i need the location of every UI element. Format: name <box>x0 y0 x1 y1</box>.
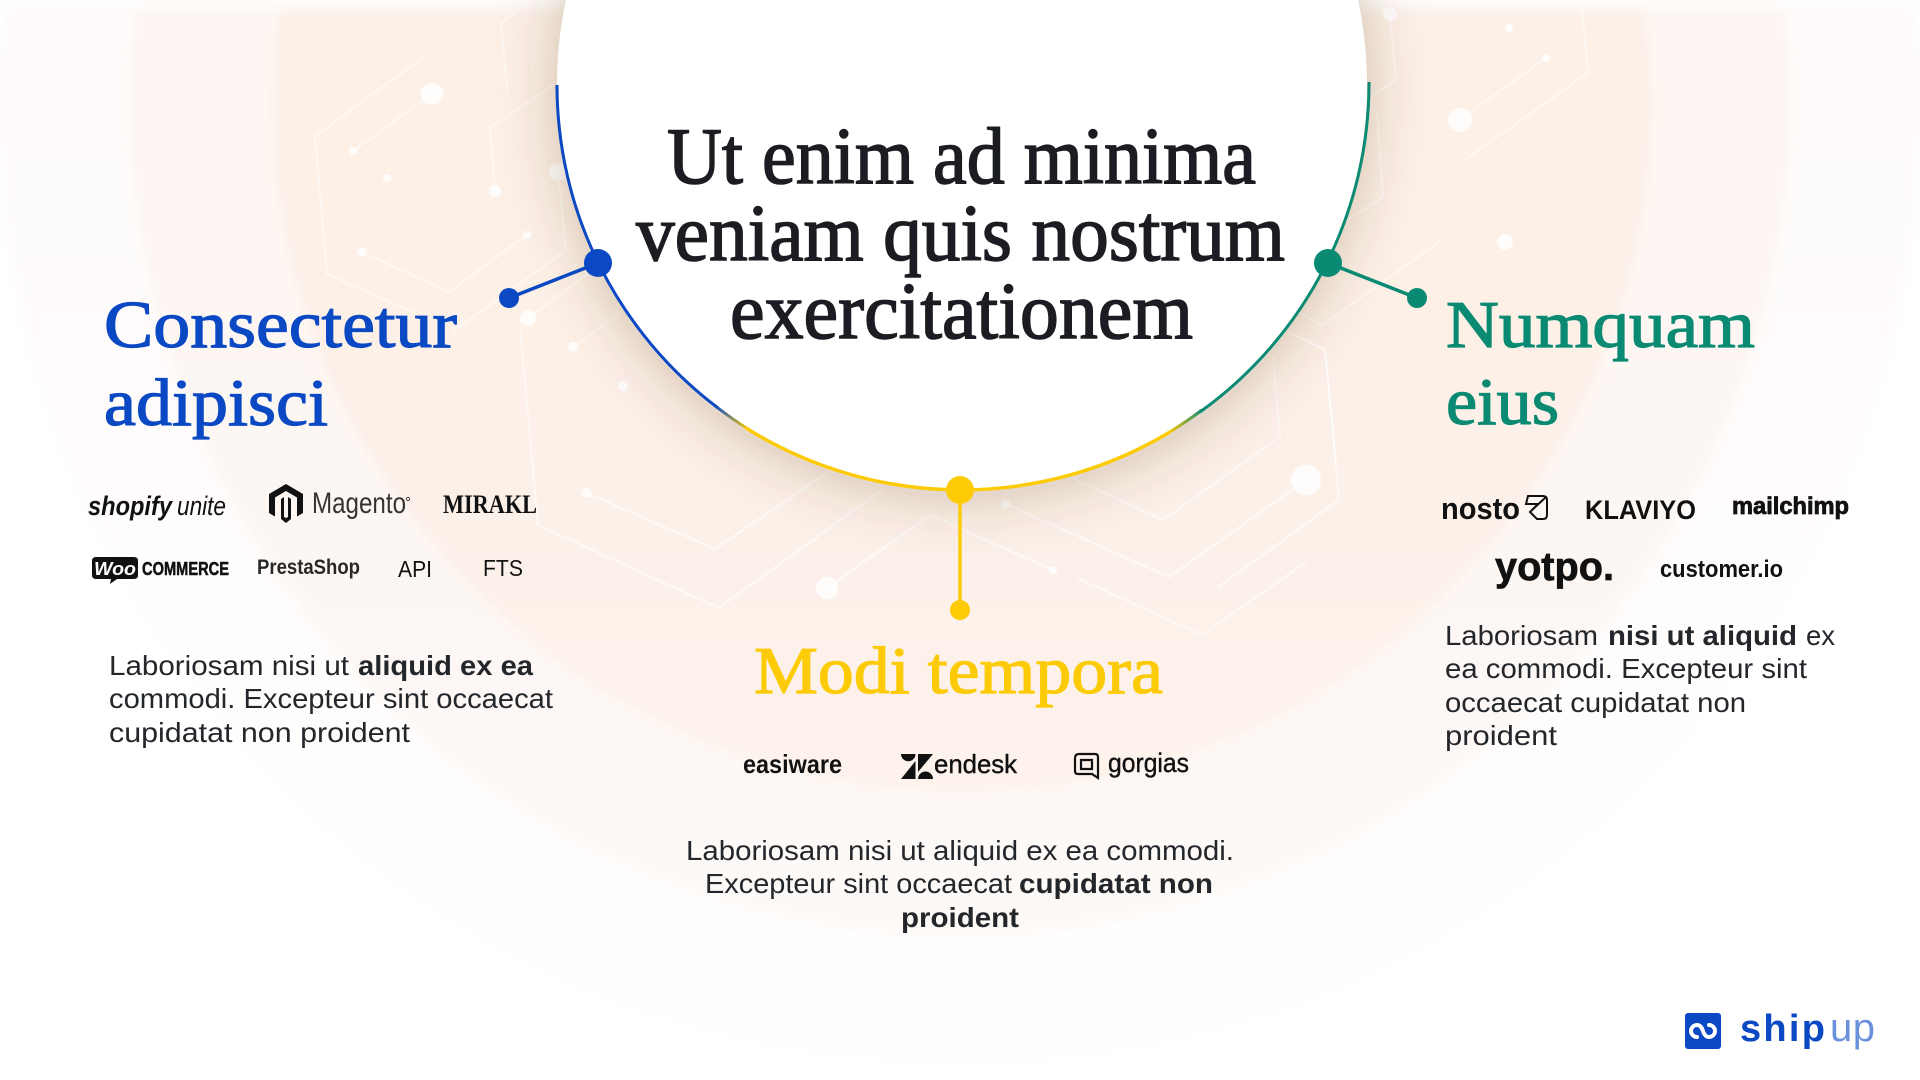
text block: centre description <box>686 835 1234 933</box>
logo: shopify unite <box>88 491 226 521</box>
title <box>636 111 1285 356</box>
heading: Consectetur adipisci <box>104 288 457 440</box>
logo: PrestaShop: PrestaShop <box>257 556 360 579</box>
text block: right description: proident <box>1445 720 1557 751</box>
logo: Magento <box>269 484 410 523</box>
text block: left description: Laboriosam nisi ut <box>109 650 349 681</box>
panel: left column <box>88 288 553 748</box>
heading: Consectetur adipisci: Consectetur <box>104 288 457 362</box>
heading: Numquam eius: Numquam <box>1446 288 1755 362</box>
text block: left description: cupidatat non proident <box>109 717 410 748</box>
title: exercitationem <box>730 266 1193 356</box>
heading: Numquam eius <box>1446 288 1755 439</box>
text block: centre description: Laboriosam nisi ut aliquid ex ea commodi. <box>686 835 1234 866</box>
logo: Zendesk: endesk <box>934 749 1018 779</box>
logo: gorgias <box>1075 748 1189 778</box>
logo: shipup brand: ship <box>1740 1008 1825 1050</box>
background circuit pattern <box>315 0 1588 635</box>
text block: right description <box>1445 620 1835 751</box>
logo: gorgias: gorgias <box>1108 748 1189 778</box>
text block: right description: occaecat cupidatat non <box>1445 687 1746 718</box>
title: veniam quis nostrum <box>636 188 1285 278</box>
logo: FTS: FTS <box>483 555 523 581</box>
heading: Consectetur adipisci: adipisci <box>104 366 328 440</box>
text block: centre description: proident <box>901 902 1019 933</box>
logo: Klaviyo: KLAVIYO <box>1585 495 1696 525</box>
title: Ut enim ad minima <box>667 111 1256 201</box>
logo: shipup brand <box>1685 1006 1875 1050</box>
text block: right description: nisi ut aliquid <box>1608 620 1797 651</box>
central white circle <box>557 0 1367 490</box>
logo: customer.io: customer.io <box>1660 556 1783 583</box>
logo: Mirakl: MIRAKL <box>443 490 537 519</box>
heading: Numquam eius: eius <box>1446 365 1559 439</box>
panel: centre column <box>686 634 1234 933</box>
panel: right column <box>1441 288 1849 751</box>
logo: WooCommerce: Woo <box>94 559 136 579</box>
heading: Modi tempora: Modi tempora <box>754 634 1163 708</box>
logo: WooCommerce <box>92 557 229 584</box>
text block: left description: aliquid ex ea <box>358 650 533 681</box>
logo: nosto: nosto <box>1441 491 1520 526</box>
logo: shopify unite: unite <box>177 491 226 521</box>
text block: centre description: Excepteur sint occaecat <box>705 868 1012 899</box>
connector: yellow <box>946 476 974 620</box>
logo: API: API <box>398 556 432 582</box>
connector: blue <box>499 249 612 308</box>
top edge fade <box>0 0 1920 16</box>
logo: Magento: Magento <box>312 487 406 520</box>
text block: left description: commodi. Excepteur sint occaecat <box>109 683 553 714</box>
logo: shopify unite: shopify <box>88 491 174 521</box>
text block: right description: ea commodi. Excepteur sint <box>1445 653 1807 684</box>
coloured arc around circle <box>557 82 1369 490</box>
logo: easiware: easiware <box>743 749 842 779</box>
text block: right description: Laboriosam <box>1445 620 1598 651</box>
logo: yotpo: yotpo. <box>1495 545 1614 589</box>
logo: WooCommerce: COMMERCE <box>142 559 229 579</box>
logo: mailchimp: mailchimp <box>1732 493 1849 520</box>
text block: left description <box>109 650 553 748</box>
logo: shipup brand: up <box>1830 1006 1875 1050</box>
connector: teal <box>1314 249 1427 308</box>
text block: centre description: cupidatat non <box>1019 868 1213 899</box>
text block: right description: ex <box>1806 620 1835 651</box>
